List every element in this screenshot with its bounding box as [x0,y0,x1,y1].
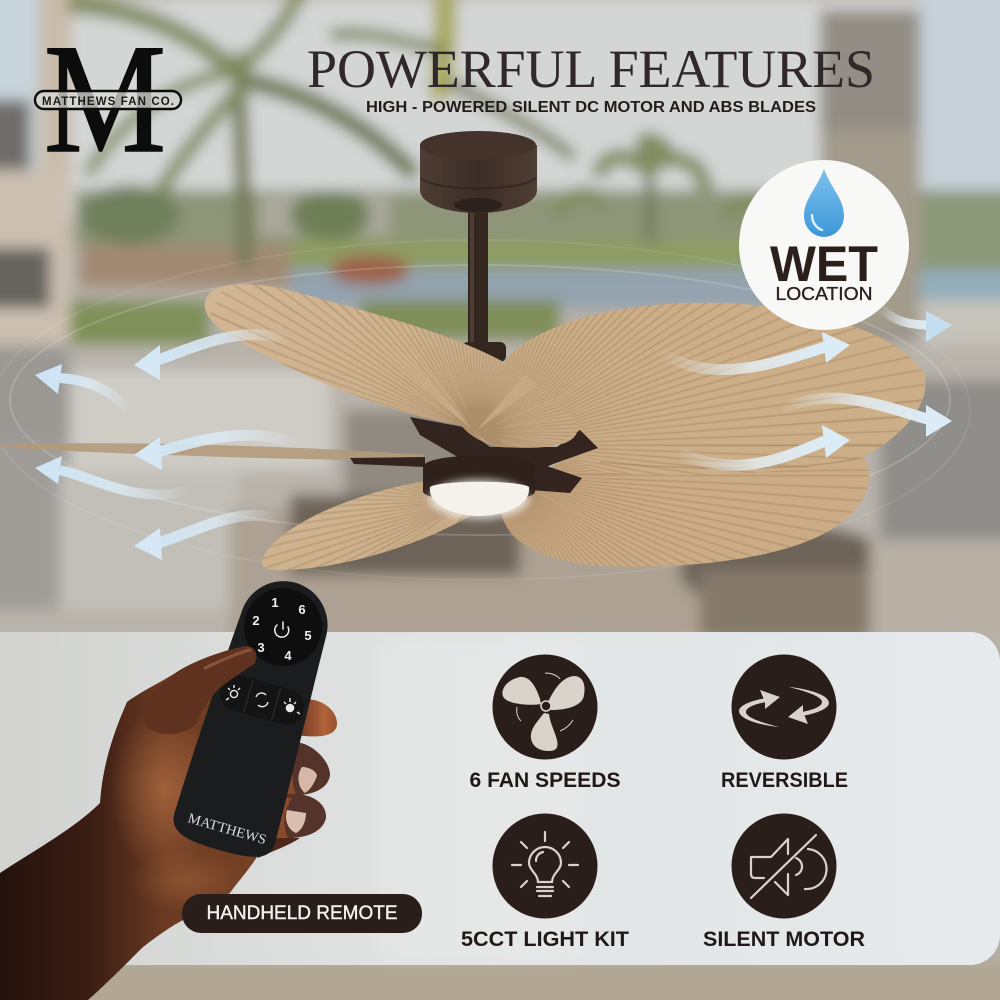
label: REVERSIBLE [721,769,848,792]
remote numbers [252,595,312,663]
floor and furniture [0,345,1000,645]
icon: muted speaker [732,814,836,918]
fan blade: lower right [501,455,870,567]
remote numbers: 2 [252,613,260,628]
motor housing and light [423,456,535,519]
panel: features [0,632,1000,965]
palm shapes [75,0,770,260]
remote numbers: 5 [304,628,312,643]
feature: 5CCT light kit [461,814,629,951]
fan mount: canopy and downrod [420,131,537,362]
location label: LOCATION [776,284,872,304]
remote numbers: 1 [271,595,279,610]
fan blade: upper left [204,284,578,448]
remote numbers: 3 [257,640,265,655]
hand holding remote [0,568,346,1000]
fan blade: thin left blade [0,443,425,461]
feature: reversible [721,654,848,792]
icon: light bulb [492,814,598,918]
fan blade: upper right [504,302,926,475]
airflow arrows left [35,335,300,560]
label: SILENT MOTOR [703,928,865,951]
hand: palm and arm [0,660,300,1000]
remote label pill [182,894,422,933]
fan blade: lower left [262,482,470,570]
hand: fingers [255,699,337,858]
icon: fan [492,654,598,760]
fan brackets [350,417,598,493]
remote label pill: HANDHELD REMOTE [206,902,398,924]
wet label: WET [770,236,878,292]
remote button icons [226,685,300,714]
logo: Matthews Fan Co.: M [44,12,166,185]
subtitle: HIGH - POWERED SILENT DC MOTOR AND ABS BLADES [366,99,816,116]
logo: Matthews Fan Co.: MATTHEWS FAN CO. [42,96,174,108]
label: 5CCT LIGHT KIT [461,928,629,951]
icon: water drop [804,169,844,237]
remote control body [168,568,346,864]
wet location badge [739,160,909,330]
icon: reverse arrows [732,654,836,760]
air motion arcs [0,240,970,580]
remote power icon [275,622,289,637]
remote dial [235,579,331,675]
hand: thumb [143,646,256,734]
remote brand text: MATTHEWS [186,811,268,848]
remote numbers: 4 [284,648,292,663]
label: 6 FAN SPEEDS [470,769,620,792]
title: POWERFUL FEATURES [307,39,875,99]
feature: 6 fan speeds [470,654,620,792]
feature: silent motor [703,814,865,951]
remote buttons [216,671,308,729]
remote numbers: 6 [298,602,306,617]
airflow arrows right [660,308,952,465]
